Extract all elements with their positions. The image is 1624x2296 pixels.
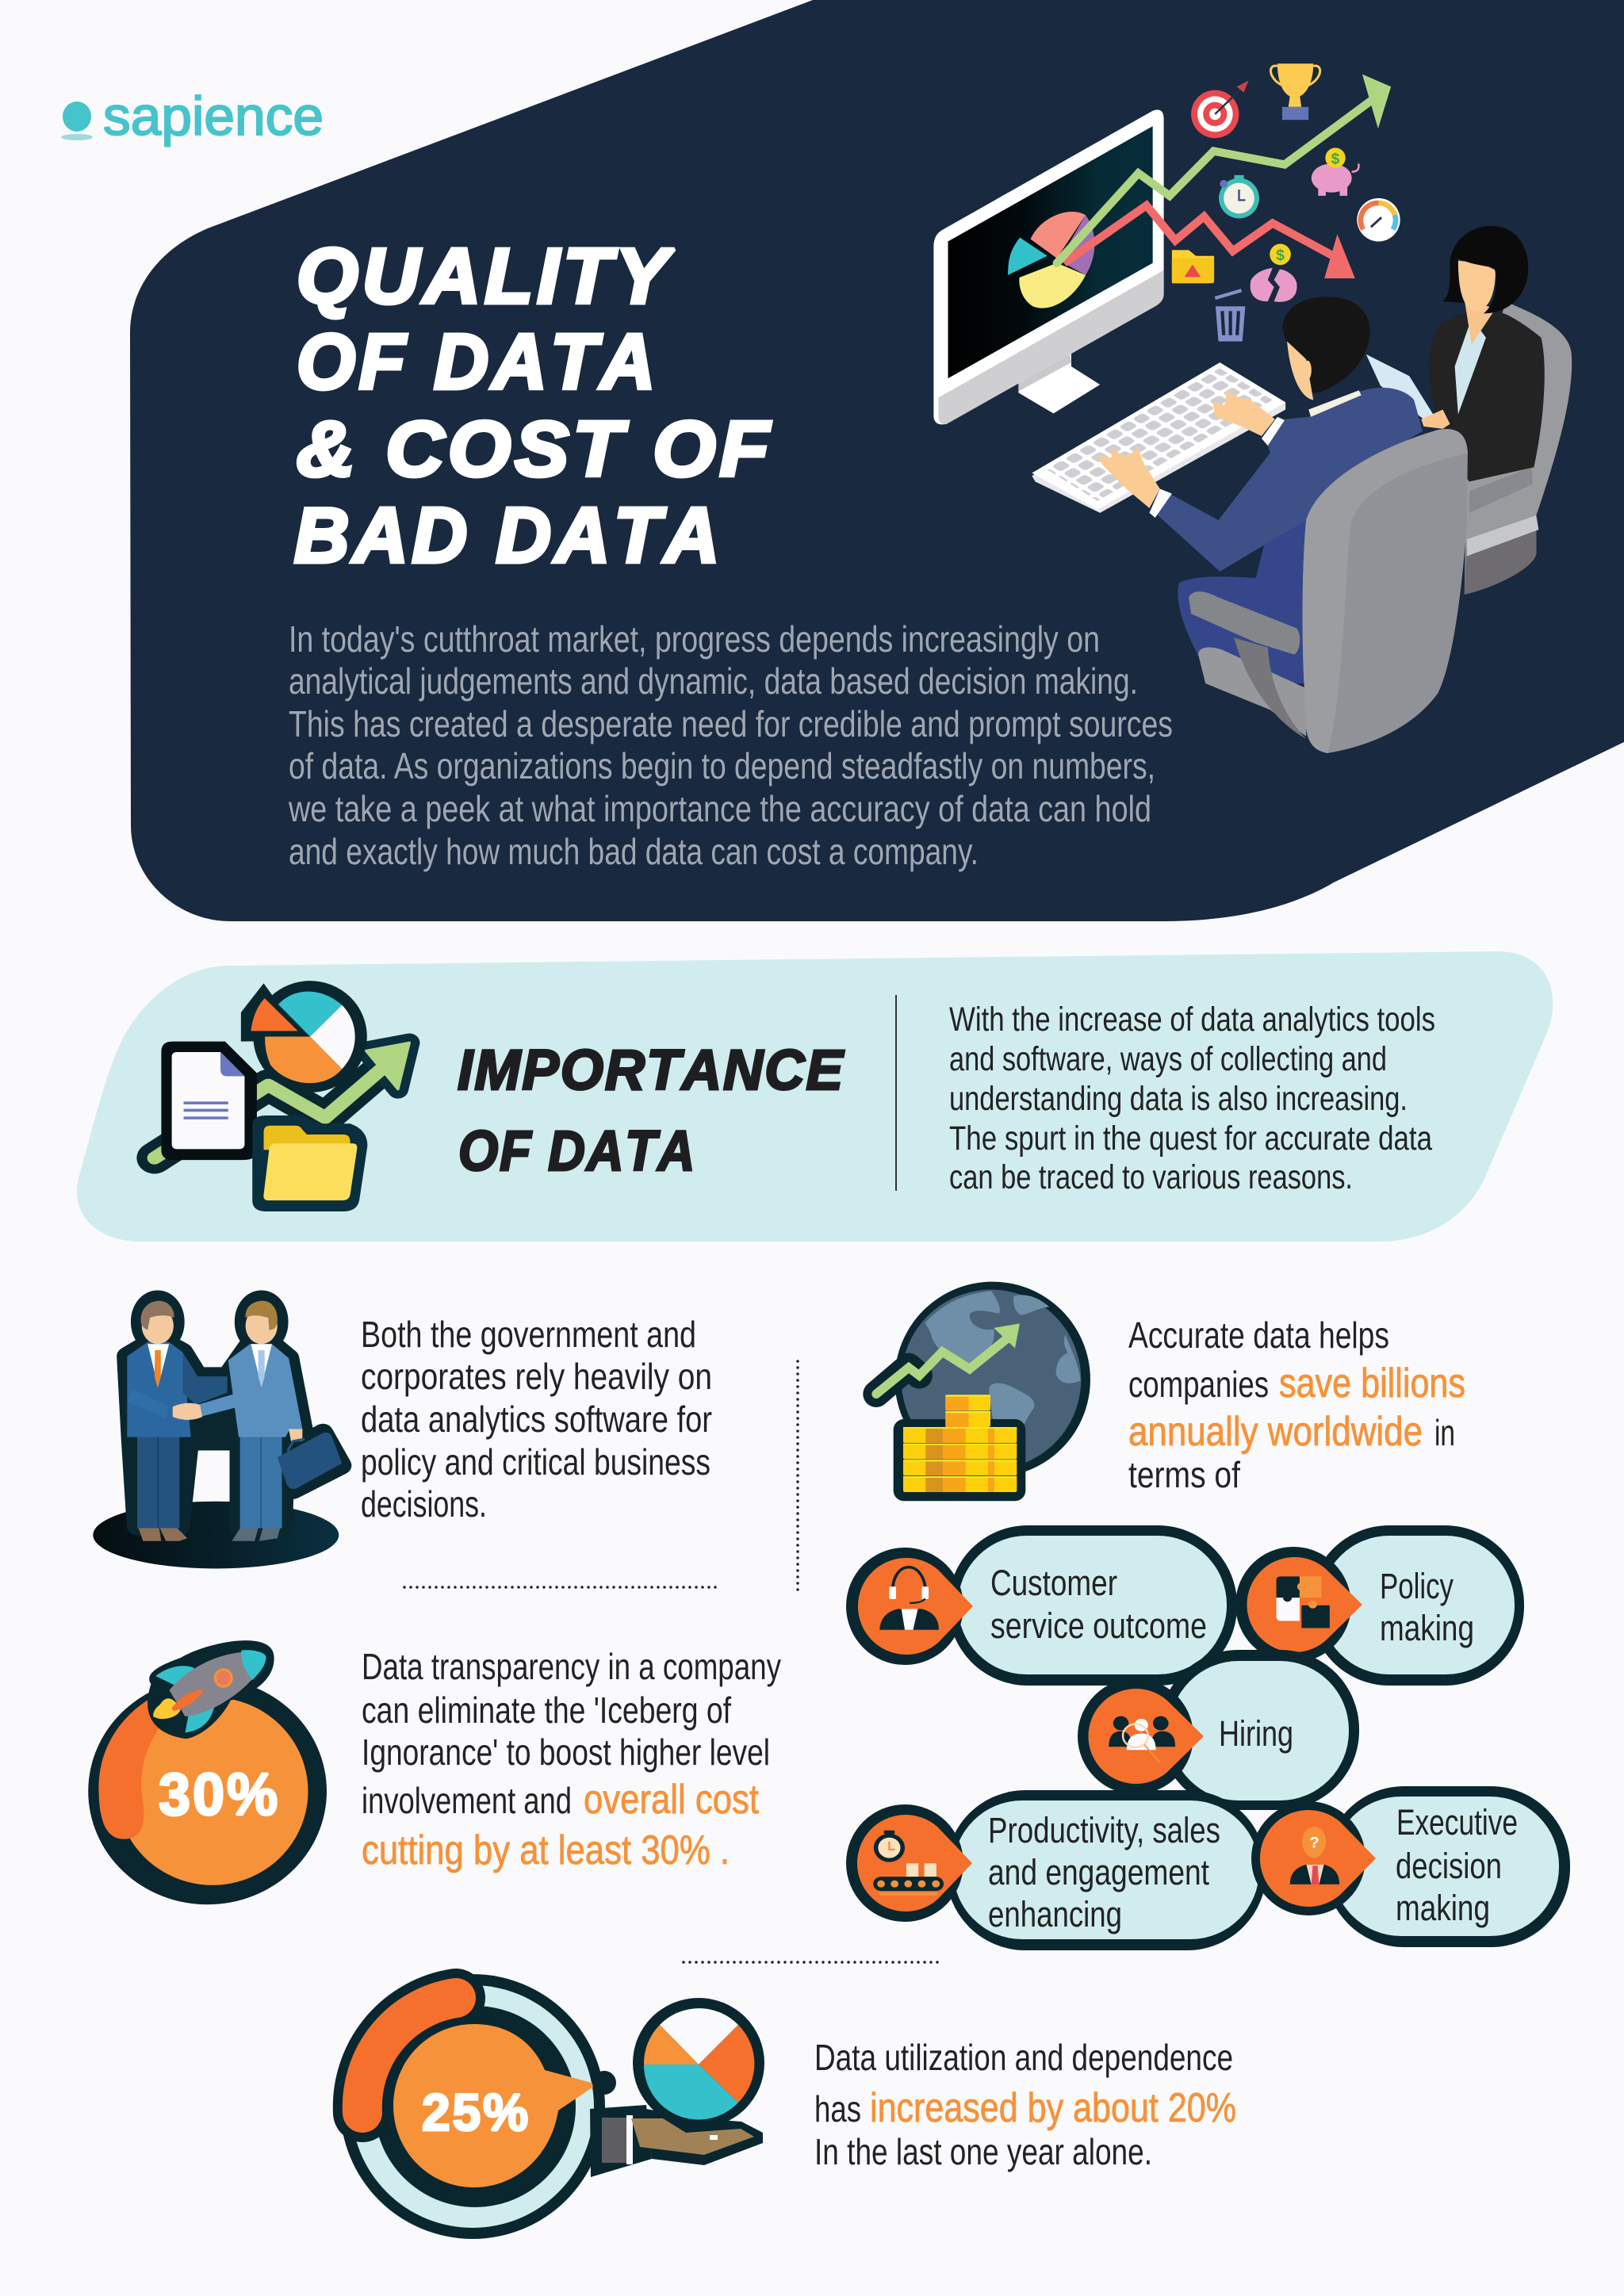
man in blue suit	[1097, 297, 1423, 683]
section heading	[458, 1039, 845, 1183]
section intro text: and software, ways of collecting and	[949, 1040, 1387, 1078]
computer monitor	[933, 110, 1164, 424]
section intro text: With the increase of data analytics tools	[949, 1001, 1435, 1039]
globe	[894, 1282, 1090, 1477]
badge circle	[88, 1678, 327, 1904]
icon: puzzle	[1277, 1576, 1330, 1628]
pie chart	[241, 981, 367, 1093]
title	[294, 232, 773, 579]
silhouettes outline	[127, 1299, 341, 1526]
text: data transparency: can eliminate the 'Iceberg of	[362, 1689, 731, 1731]
folder	[252, 1115, 367, 1211]
pie chart in hand	[633, 1998, 764, 2128]
sleeve and hand	[590, 2071, 763, 2177]
rising green arrow	[1057, 75, 1391, 263]
section intro text: The spurt in the quest for accurate data	[949, 1119, 1432, 1158]
stat value: 25%: 25%	[422, 2083, 530, 2141]
hero dark panel	[130, 0, 1624, 921]
icon: executive with question	[1290, 1827, 1339, 1885]
icon: target	[1191, 81, 1249, 138]
text: government and corporates: policy and critical business	[361, 1441, 710, 1483]
icon: stopwatch	[1219, 175, 1259, 218]
woman's chair	[1465, 301, 1572, 595]
woman	[1366, 226, 1545, 482]
briefcase	[278, 1433, 342, 1489]
icon: production conveyor	[873, 1831, 944, 1896]
intro paragraph: of data. As organizations begin to depend steadfastly on numbers,	[289, 745, 1155, 786]
text: government and corporates: Both the government and	[361, 1314, 696, 1355]
text: accurate data: companies	[1128, 1364, 1269, 1405]
section intro text	[949, 1001, 1435, 1196]
icon: data documents and charts	[155, 981, 409, 1211]
title: QUALITY	[297, 232, 675, 320]
intro paragraph: we take a peek at what importance the accuracy of data can hold	[288, 788, 1151, 829]
benefit: policy making: making	[1380, 1608, 1474, 1648]
text: accurate data: in	[1434, 1412, 1455, 1453]
text: data utilization	[814, 2037, 1236, 2172]
intro paragraph: This has created a desperate need for credible and prompt sources	[289, 703, 1173, 744]
text: accurate data: save billions	[1279, 1360, 1465, 1406]
section heading: IMPORTANCE	[458, 1039, 845, 1102]
benefit: productivity, sales and engagement	[846, 1790, 1266, 1950]
icon: broken piggy bank	[1251, 244, 1297, 302]
icon: warning folder	[1172, 250, 1214, 283]
arrow outline	[155, 1057, 396, 1158]
text: data transparency: overall cost	[584, 1777, 759, 1823]
icon: customer service agent	[879, 1567, 939, 1630]
ground shadow	[93, 1502, 339, 1568]
text: data transparency: cutting by at least 30% .	[362, 1827, 730, 1873]
coin stacks	[894, 1395, 1025, 1501]
stat value: 30%: 30%	[159, 1761, 280, 1827]
text: government and corporates: data analytics software for	[361, 1399, 712, 1440]
title: OF DATA	[297, 318, 659, 405]
section banner: importance of data	[77, 951, 1553, 1242]
logo: sapience: sapience	[103, 86, 324, 147]
hero illustration: analysts at computer	[933, 63, 1572, 753]
growth arrow	[155, 1043, 409, 1158]
benefit: policy making	[1235, 1525, 1524, 1686]
icon: piggy bank: $	[1331, 150, 1340, 167]
orange arc	[362, 1998, 456, 2113]
benefit: customer service outcome	[846, 1525, 1237, 1686]
icon: trash can	[1215, 290, 1245, 342]
section intro text: can be traced to various reasons.	[949, 1158, 1353, 1196]
arrow outline	[876, 1366, 919, 1394]
falling red arrow	[1064, 205, 1355, 278]
icon: trophy	[1270, 63, 1320, 120]
icon: hiring search	[1109, 1716, 1175, 1762]
icon: gauge	[1357, 198, 1400, 242]
text: data transparency: Data transparency in a company	[362, 1646, 781, 1687]
benefit: executive decision making: Executive	[1396, 1802, 1518, 1843]
speech bubble centre	[393, 2024, 597, 2187]
title: & COST OF	[297, 405, 773, 492]
benefit: hiring	[1078, 1650, 1359, 1810]
section intro text: understanding data is also increasing.	[949, 1080, 1408, 1118]
text: accurate data: Accurate data helps	[1128, 1314, 1389, 1356]
icon: executive with question: ?	[1309, 1835, 1320, 1851]
text: government and corporates: corporates rely heavily on	[361, 1356, 712, 1397]
text: accurate data	[1128, 1314, 1465, 1495]
text: data utilization: In the last one year alone.	[814, 2131, 1152, 2172]
benefit: hiring: Hiring	[1219, 1713, 1293, 1754]
text: data transparency: involvement and	[362, 1780, 572, 1821]
text: government and corporates	[361, 1314, 712, 1525]
benefit: executive decision making: making	[1396, 1888, 1490, 1928]
benefit: executive decision making	[1251, 1786, 1570, 1947]
text: government and corporates: decisions.	[361, 1483, 487, 1525]
benefit: productivity, sales and engagement: and engagement	[988, 1852, 1209, 1892]
benefit: productivity, sales and engagement: Productivity, sales	[988, 1810, 1220, 1850]
icon: piggy bank	[1312, 147, 1359, 196]
section heading: OF DATA	[458, 1120, 696, 1183]
text: accurate data: terms of	[1128, 1454, 1240, 1495]
title: BAD DATA	[294, 492, 723, 579]
icon: businessmen shaking hands	[93, 1299, 342, 1568]
section divider	[895, 995, 897, 1191]
stat icon: 25% gauge with hand and pie	[340, 1974, 764, 2239]
right businessman	[173, 1301, 302, 1541]
icon: globe with coins	[876, 1282, 1090, 1501]
text: accurate data: annually worldwide	[1128, 1409, 1423, 1455]
benefit: executive decision making: decision	[1396, 1846, 1502, 1886]
text: data transparency: Ignorance' to boost higher level	[362, 1732, 770, 1773]
document	[161, 1042, 257, 1160]
man's chair	[1189, 429, 1468, 753]
stat icon: 30% badge	[88, 1640, 327, 1904]
intro paragraph: analytical judgements and dynamic, data based decision making.	[289, 660, 1138, 702]
benefit: customer service outcome: service outcome	[990, 1605, 1207, 1646]
benefit: productivity, sales and engagement: enhancing	[988, 1894, 1122, 1934]
keyboard	[1032, 362, 1285, 513]
text: data utilization: Data utilization and dependence	[814, 2037, 1233, 2078]
intro paragraph	[288, 618, 1173, 872]
text: data utilization: has	[814, 2088, 861, 2130]
icon: broken piggy bank: $	[1276, 247, 1285, 264]
growth arrow	[876, 1323, 1020, 1394]
text: data transparency	[362, 1646, 781, 1873]
benefit: policy making: Policy	[1380, 1566, 1454, 1606]
intro paragraph: and exactly how much bad data can cost a company.	[289, 831, 979, 872]
text: data utilization: increased by about 20%	[870, 2085, 1236, 2131]
left businessman	[127, 1301, 228, 1541]
pill icons	[873, 1567, 1339, 1896]
rocket	[147, 1640, 274, 1739]
intro paragraph: In today's cutthroat market, progress depends increasingly on	[289, 618, 1100, 660]
benefit: customer service outcome: Customer	[990, 1563, 1117, 1603]
dotted dividers	[404, 1361, 941, 1962]
